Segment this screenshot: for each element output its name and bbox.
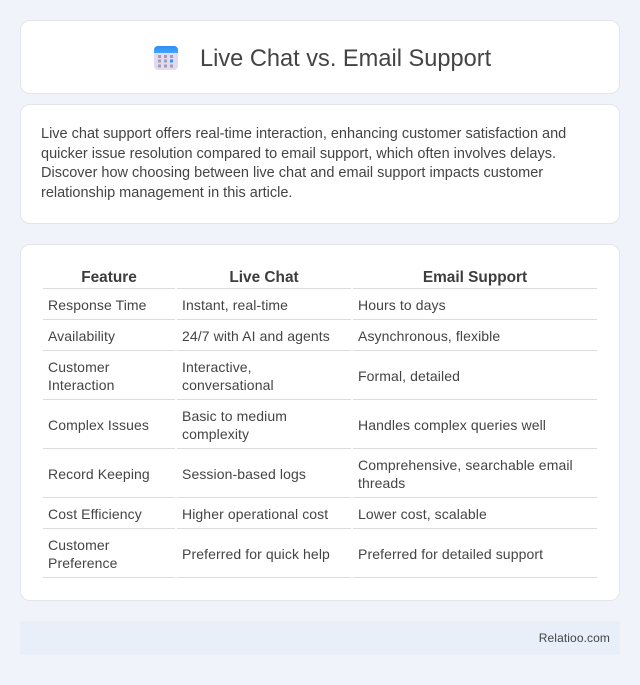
table: comparison: Preferred for quick help xyxy=(182,546,330,562)
table: comparison: Instant, real-time xyxy=(182,297,288,313)
table: comparison: Record Keeping xyxy=(48,466,150,482)
text block: introduction xyxy=(41,126,566,201)
table: comparison: Customer xyxy=(48,537,109,553)
table: comparison: Complex Issues xyxy=(48,417,149,433)
title: Live Chat vs. Email Support xyxy=(200,46,491,72)
table: comparison: Cost Efficiency xyxy=(48,506,142,522)
icon: calendar xyxy=(154,46,178,70)
table: comparison: complexity xyxy=(182,426,249,442)
panel: comparison table xyxy=(20,244,620,601)
table: comparison: Lower cost, scalable xyxy=(358,506,487,522)
table: comparison: Higher operational cost xyxy=(182,506,328,522)
footer text: Relatioo.com xyxy=(539,631,610,645)
table: comparison: Handles complex queries well xyxy=(358,417,546,433)
table: comparison: Availability xyxy=(48,328,115,344)
text block: introduction: quicker issue resolution compared to email support, which often involves delays. xyxy=(41,146,556,162)
table: comparison: Customer xyxy=(48,359,109,375)
table: comparison: Comprehensive, searchable email xyxy=(358,457,573,473)
table: comparison: threads xyxy=(358,475,405,491)
table: comparison: Email Support xyxy=(423,269,527,286)
footer xyxy=(20,621,620,655)
text block: introduction: Live chat support offers real-time interaction, enhancing customer satisfaction and xyxy=(41,126,566,142)
table: comparison: Response Time xyxy=(48,297,147,313)
table: comparison: Preference xyxy=(48,555,117,571)
table: comparison: Feature xyxy=(81,269,137,286)
table: comparison: Asynchronous, flexible xyxy=(358,328,500,344)
table: comparison: Formal, detailed xyxy=(358,368,460,384)
text block: introduction: Discover how choosing between live chat and email support impacts customer xyxy=(41,165,543,181)
table: comparison: Basic to medium xyxy=(182,408,287,424)
table: comparison: Hours to days xyxy=(358,297,446,313)
table: comparison: Interactive, xyxy=(182,359,252,375)
table: comparison: 24/7 with AI and agents xyxy=(182,328,330,344)
text block: introduction: relationship management in this article. xyxy=(41,185,292,201)
panel: introduction xyxy=(20,104,620,224)
table: comparison: Preferred for detailed support xyxy=(358,546,543,562)
table: comparison: Session-based logs xyxy=(182,466,306,482)
table: comparison: conversational xyxy=(182,377,274,393)
table: comparison: Interaction xyxy=(48,377,114,393)
table: comparison: Live Chat xyxy=(229,269,299,286)
table: comparison xyxy=(43,269,597,578)
panel: title card xyxy=(20,20,620,94)
